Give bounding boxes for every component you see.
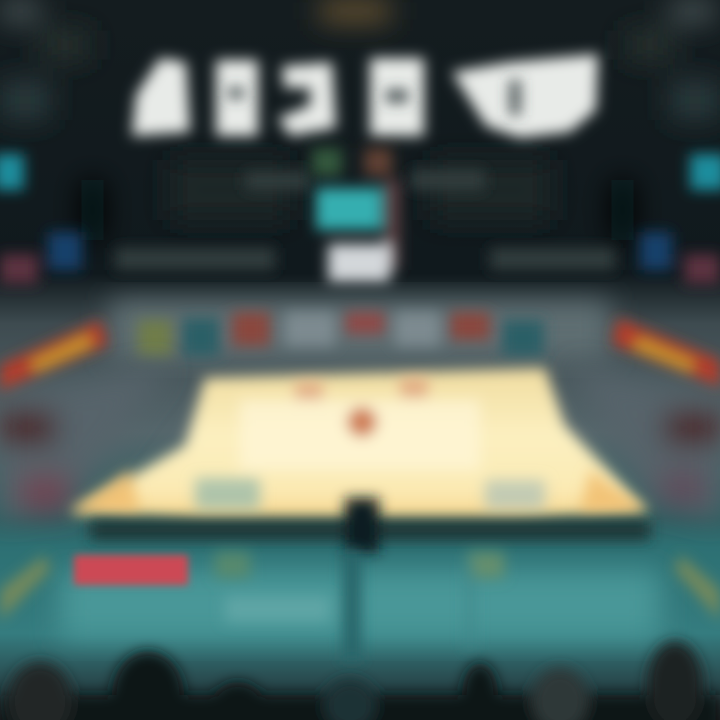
side screens and lights bbox=[0, 154, 720, 284]
foreground crowd silhouettes bbox=[0, 641, 720, 720]
lower floor details bbox=[74, 555, 188, 585]
title: blurred scoreboard lettering bbox=[132, 54, 598, 138]
central hanging scoreboard bbox=[312, 148, 400, 282]
banner band above court bbox=[110, 300, 610, 360]
side banners: red and yellow bbox=[0, 318, 720, 392]
side stands bbox=[0, 365, 720, 520]
court markings bbox=[70, 378, 648, 512]
lower teal floor bbox=[60, 570, 660, 640]
upper stand texture bbox=[0, 0, 720, 240]
courtside silhouette band bbox=[90, 498, 650, 554]
subtitle: blurred text bands bbox=[115, 170, 615, 270]
title letter gaps bbox=[228, 80, 520, 115]
court bbox=[70, 368, 648, 520]
